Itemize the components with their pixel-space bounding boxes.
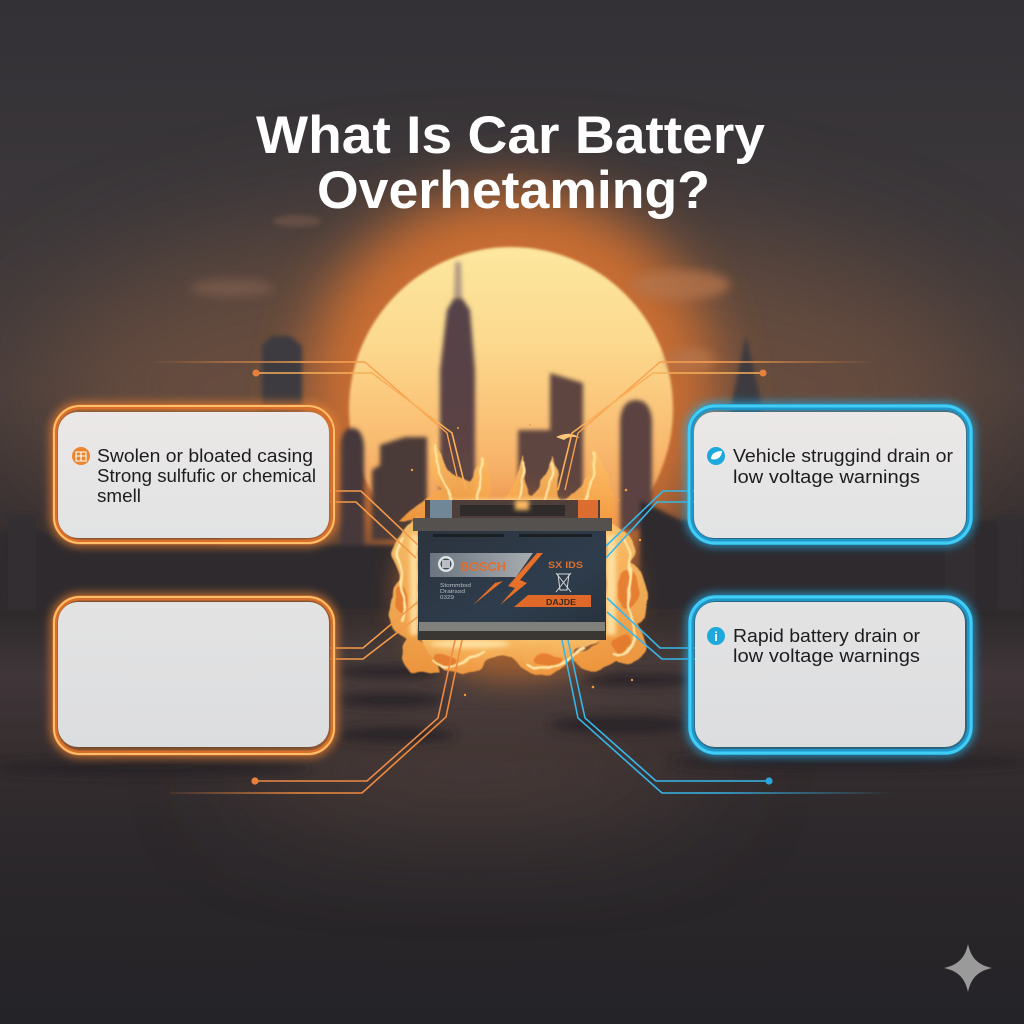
symptom text: Strong sulfufic or chemical xyxy=(97,466,316,486)
lightning bolt xyxy=(473,553,543,605)
model code: SX IDS xyxy=(548,560,583,570)
small fire sparks xyxy=(411,424,641,696)
pale flame highlights xyxy=(398,445,635,669)
panel: top left symptoms xyxy=(54,406,334,543)
symptom text: low voltage warnings xyxy=(733,646,920,666)
pale hot edges xyxy=(410,499,616,648)
BOSCH label plate xyxy=(430,553,533,577)
central tower xyxy=(440,262,475,520)
battery case xyxy=(418,531,606,640)
orange band xyxy=(514,595,591,607)
icon: leaf badge xyxy=(707,447,725,465)
connector lines: orange, upper xyxy=(147,362,877,490)
icon: battery grid xyxy=(72,447,90,465)
icon: sparkle watermark xyxy=(944,944,992,992)
flame tongues xyxy=(390,437,649,676)
battery lid xyxy=(413,518,612,531)
symptom text xyxy=(733,446,953,487)
title: Overhetaming? xyxy=(317,161,710,220)
flames around the battery xyxy=(390,434,649,680)
flame glow xyxy=(397,500,633,680)
symptom text: Swolen or bloated casing xyxy=(97,446,313,466)
small specification text: Stommbsd xyxy=(440,583,471,589)
connector node: lower left xyxy=(251,777,259,785)
symptom text: Rapid battery drain or xyxy=(733,626,920,646)
sun xyxy=(349,247,673,571)
battery top terminals xyxy=(425,500,600,518)
battery xyxy=(413,500,612,640)
panel: bottom right symptoms xyxy=(690,597,971,753)
small specification text: 0329 xyxy=(440,595,454,601)
brand name: BOSCH xyxy=(460,559,506,574)
connector node: upper left xyxy=(252,370,260,376)
panel: top right symptoms xyxy=(689,406,971,543)
title xyxy=(256,106,766,220)
icon: info badge: i xyxy=(714,629,718,644)
small specification text: Drairssd xyxy=(440,589,465,595)
small specification text xyxy=(440,583,471,601)
symptom text: low voltage warnings xyxy=(733,467,920,487)
recycle icon xyxy=(556,573,571,592)
symptom text xyxy=(733,626,920,666)
connector node: upper right xyxy=(760,370,766,376)
blurred city skyline xyxy=(0,262,1024,610)
sun-side clouds xyxy=(630,270,730,372)
title: What Is Car Battery xyxy=(256,106,766,165)
symptom text: Vehicle struggind drain or xyxy=(733,446,953,466)
curled wisp xyxy=(556,434,580,440)
symptom text: smell xyxy=(97,486,141,506)
connector lines: left cards xyxy=(170,491,462,793)
brand emblem xyxy=(438,556,454,572)
panel: bottom left empty xyxy=(54,597,334,754)
deep orange swirls xyxy=(396,572,639,666)
connector lines: right cards xyxy=(562,491,893,793)
band text: DAJDE xyxy=(546,597,576,607)
icon: info badge xyxy=(707,627,725,645)
ground ripple bands xyxy=(0,665,1024,776)
symptom text xyxy=(97,446,316,506)
connector node: lower right xyxy=(765,777,773,785)
